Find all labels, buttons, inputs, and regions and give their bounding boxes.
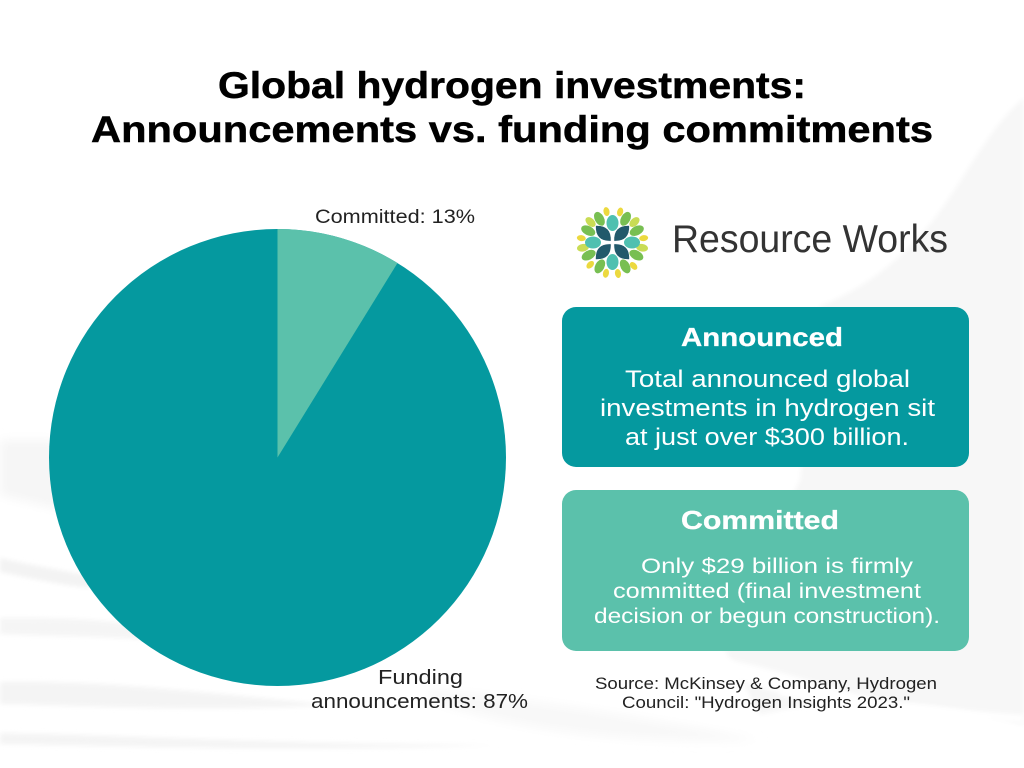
pie slice: committed 13% [278, 229, 398, 458]
icon: flower [576, 207, 649, 278]
text: announced body: Total announced global [625, 366, 910, 393]
pie chart [49, 229, 506, 686]
heading: committed: Committed [681, 505, 839, 535]
title: Global hydrogen investments: [218, 65, 806, 106]
source note: Council: "Hydrogen Insights 2023." [622, 693, 910, 712]
logo wordmark: Resource Works [672, 218, 948, 261]
text: announced body: at just over $300 billion. [625, 424, 909, 451]
pie label: funding announcements [311, 667, 528, 713]
pie label: funding announcements: Funding [378, 667, 463, 689]
panel: announced [562, 307, 969, 467]
title [91, 65, 933, 150]
logo: Resource Works [576, 207, 948, 278]
text: committed body: committed (final investment [613, 580, 921, 603]
heading: announced: Announced [681, 322, 843, 352]
panel: committed [562, 490, 969, 651]
text: committed body: Only $29 billion is firmly [641, 555, 914, 578]
pie label: committed: Committed: 13% [315, 207, 475, 228]
pie slice: funding announcements 87% [49, 229, 506, 686]
pie label: funding announcements: announcements: 87% [311, 691, 528, 713]
text: announced body [600, 366, 935, 451]
source note [595, 674, 937, 712]
text: announced body: investments in hydrogen sit [600, 395, 935, 422]
text: committed body: decision or begun construction). [594, 605, 940, 628]
text: committed body [594, 555, 940, 628]
title: Announcements vs. funding commitments [91, 109, 933, 150]
source note: Source: McKinsey & Company, Hydrogen [595, 674, 937, 693]
